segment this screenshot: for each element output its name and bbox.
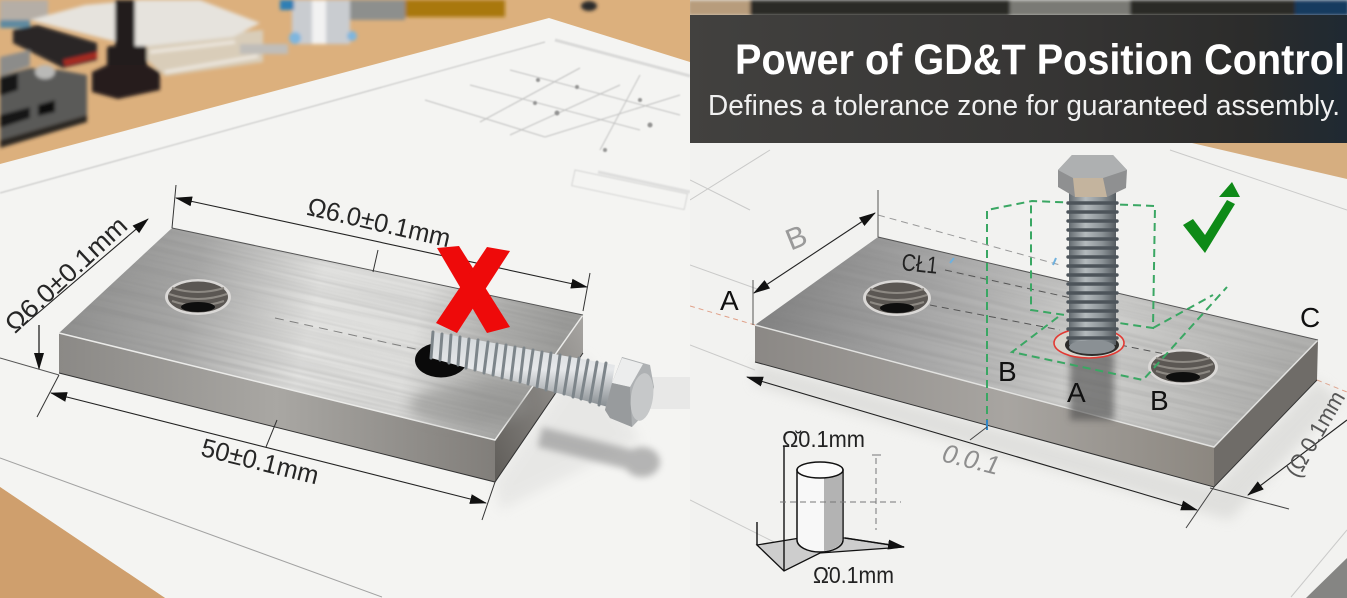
bolt thread: [431, 332, 606, 405]
inset: cylindrical tolerance zone: [757, 426, 904, 588]
label: datum B right: B: [1150, 385, 1169, 416]
label: 0.0.1: 0.0.1: [939, 438, 1003, 481]
icon: red X: [436, 246, 510, 333]
wood edge bottom left: [0, 487, 165, 598]
icon: upright bolt: [1058, 155, 1127, 356]
plate top face: [755, 237, 1318, 447]
threaded hole: right plate right: [1148, 349, 1218, 385]
inset base plane: [757, 538, 904, 571]
label: datum C: C: [1300, 302, 1320, 333]
dimension: top length: [172, 185, 590, 311]
datum centre lines: [930, 270, 1170, 355]
plate front face: [59, 333, 495, 482]
plate right face: [495, 315, 583, 482]
dimension: right width: [1248, 386, 1347, 495]
label: left dimension: Ω6.0±0.1mm: [0, 210, 133, 339]
tolerance zone floor (dashed green): [1012, 287, 1227, 380]
plate shadow: [499, 394, 632, 502]
label: bottom dimension: 50±0.1mm: [198, 432, 322, 490]
threaded hole: left plate: [165, 279, 231, 315]
smudge on plate top: [410, 385, 530, 425]
blurred top strip: [688, 0, 1347, 16]
bolt shank: [431, 332, 615, 407]
plate shadow: [755, 362, 1340, 520]
bolt cast shadow: [540, 437, 660, 477]
label: inset top: Ω̆0.1mm: [782, 426, 865, 452]
label: inset bottom: Ω̇0.1mm: [813, 562, 894, 588]
label: datum B: B: [998, 356, 1017, 387]
paper sheet: left: [0, 18, 690, 598]
missed hole: [415, 342, 467, 378]
inset cylinder: [797, 462, 843, 552]
panel: right plate with aligned bolt: [754, 236, 1336, 519]
dimension: left width: [0, 210, 148, 375]
label: datum A left: A: [720, 285, 739, 316]
label: handwritten C1: CŁ1: [900, 249, 939, 280]
bolt thread: [1068, 203, 1117, 338]
drawing grid sketch: [0, 40, 690, 210]
wood background: top right: [1192, 143, 1347, 179]
bolt head: [605, 357, 654, 427]
dark corner bottom right: [1306, 558, 1347, 598]
panel: right result scene: [675, 0, 1347, 598]
inset axes: [757, 447, 904, 571]
plate right face: [1214, 340, 1318, 487]
label: datum A center: A: [1067, 377, 1086, 408]
threaded hole: right plate left: [863, 280, 931, 316]
panel: header banner: [690, 15, 1347, 143]
panel: left plate with misaligned bolt: [58, 228, 664, 502]
label: gray B: B: [781, 219, 812, 257]
bolt shank: [1069, 192, 1116, 345]
label: top dimension: Ω6.0±0.1mm: [305, 191, 454, 253]
plate top face: [59, 228, 583, 440]
tolerance zone cylinder (dashed green): [987, 201, 1155, 427]
dimension: bottom length right: [747, 377, 1289, 528]
plate front face: [755, 325, 1214, 487]
dimension: bottom length: [37, 375, 495, 520]
panel: left workshop background: [0, 0, 743, 598]
paper lines: [690, 150, 1347, 597]
icon: green check mark: [1183, 182, 1240, 253]
subtitle: Defines a tolerance zone for guaranteed assembly.: [708, 90, 1340, 122]
bolt shadow on plate: [1070, 352, 1114, 420]
icon: tilted bolt: [431, 332, 656, 427]
faint gray tag: [650, 377, 690, 409]
bolt head: [1058, 155, 1127, 197]
center hole with red tolerance ring: [1054, 328, 1124, 358]
dimension: B arrow: [753, 190, 878, 325]
